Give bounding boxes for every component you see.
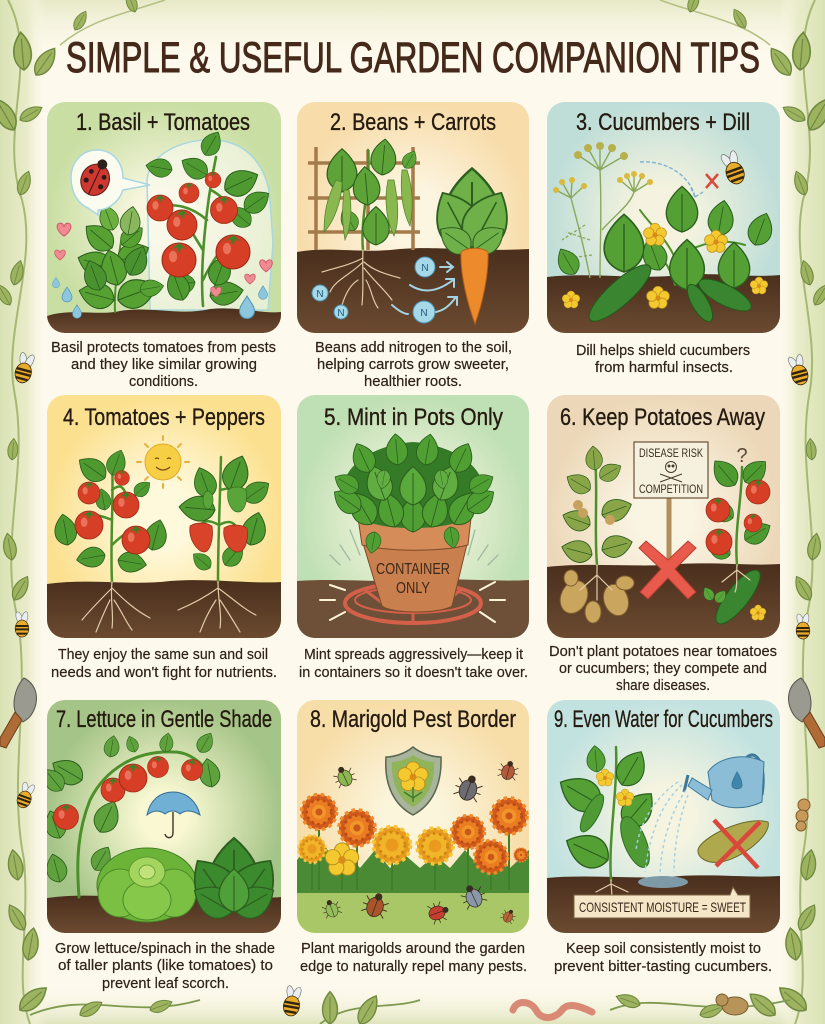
caption 7 — [55, 940, 275, 992]
pot — [358, 518, 471, 612]
trowel left — [0, 678, 36, 748]
panel title: 1. Basil + Tomatoes — [76, 109, 250, 136]
restriction ring — [345, 583, 481, 623]
roots — [596, 880, 628, 902]
caption 2: helping carrots grow sweeter, — [317, 356, 509, 373]
soil — [297, 248, 529, 333]
tomatoes — [706, 480, 770, 555]
tomatoes — [147, 172, 250, 277]
caption 5: Mint spreads aggressively—keep it — [304, 646, 524, 663]
cucumbers on plant — [576, 791, 655, 871]
bee, upper right — [786, 353, 811, 387]
panel 4: tomatoes + peppers — [47, 395, 281, 638]
panel 7: lettuce in gentle shade — [38, 700, 287, 933]
caterpillar right — [796, 799, 810, 831]
carrot — [461, 248, 488, 324]
panel 2: beans + carrots — [297, 102, 529, 333]
panel title: 6. Keep Potatoes Away — [560, 404, 765, 431]
shield — [386, 747, 441, 815]
stressed tomato plant — [705, 454, 775, 565]
bean plant — [324, 138, 420, 250]
caption 2: Beans add nitrogen to the soil, — [315, 339, 512, 356]
caption 3: Dill helps shield cucumbers — [576, 342, 750, 359]
hanging tomatoes — [54, 756, 202, 830]
bee, bottom — [281, 984, 303, 1017]
caption 5: in containers so it doesn't take over. — [299, 664, 528, 681]
panel title: 7. Lettuce in Gentle Shade — [56, 706, 272, 733]
caption 1: conditions. — [129, 373, 198, 390]
caption 1: Basil protects tomatoes from pests — [51, 339, 276, 356]
caption 3: from harmful insects. — [595, 359, 733, 376]
worm — [513, 1002, 592, 1018]
moisture sign — [574, 887, 750, 918]
caption 6: or cucumbers; they compete and — [559, 660, 767, 677]
right vine — [765, 0, 825, 1024]
pot label: ONLY — [396, 580, 430, 597]
marigolds — [298, 794, 528, 875]
panel 1: basil + tomatoes — [47, 102, 281, 333]
caption 6: share diseases. — [616, 677, 710, 694]
caption 8: edge to naturally repel many pests. — [300, 958, 527, 975]
motion lines — [320, 530, 505, 622]
caption 9 — [554, 940, 772, 975]
caption 7: prevent leaf scorch. — [102, 975, 229, 992]
umbrella — [147, 792, 200, 838]
panel title: 5. Mint in Pots Only — [324, 404, 503, 431]
soil — [47, 580, 281, 638]
cucumbers — [588, 264, 752, 322]
caption 1 — [51, 339, 276, 390]
caption 9: Keep soil consistently moist to — [566, 940, 761, 957]
pests — [320, 759, 520, 926]
bee and blocked arrow — [640, 149, 748, 197]
caption 9: prevent bitter-tasting cucumbers. — [554, 958, 772, 975]
tomato plant — [52, 447, 170, 582]
speech bubble around tomato — [147, 140, 273, 310]
bee, middle left — [14, 611, 29, 637]
cucumber flowers — [562, 223, 768, 308]
cucumber vine leaves — [552, 186, 777, 290]
tomatoes — [75, 470, 150, 554]
cucumber — [709, 564, 767, 630]
bee, lower left — [14, 780, 37, 810]
left vine — [0, 0, 61, 1024]
nitrogen markers: N — [421, 263, 429, 274]
bee, middle right — [795, 613, 810, 639]
soil — [547, 875, 780, 933]
soil — [47, 895, 281, 933]
hearts and water drops — [52, 223, 272, 318]
arrows to carrot — [392, 262, 457, 314]
panel title: 4. Tomatoes + Peppers — [63, 404, 265, 431]
nitrogen markers: N — [337, 308, 345, 319]
caption 8 — [300, 940, 527, 975]
nitrogen markers: N — [420, 308, 428, 319]
caption 3 — [576, 342, 750, 376]
puddle — [638, 876, 688, 888]
ladybug bubble — [71, 150, 150, 215]
potato plant — [559, 445, 635, 565]
tomato roots — [722, 565, 750, 592]
nitrogen markers: N — [316, 289, 324, 300]
pot label — [376, 563, 450, 593]
dill flower heads — [553, 142, 653, 193]
moisture sign: CONSISTENT MOISTURE = SWEET — [579, 899, 746, 915]
panel 5: mint in pots only — [297, 395, 529, 638]
trowel right — [789, 678, 825, 748]
cucumber flowers — [596, 769, 634, 806]
panel 6: keep potatoes away — [547, 395, 780, 638]
question mark: ? — [736, 445, 748, 467]
basil plant — [74, 202, 165, 313]
foliage band — [297, 845, 529, 893]
lettuce — [97, 848, 197, 922]
caption 5 — [299, 646, 528, 681]
stems — [312, 830, 509, 890]
small leaves and star flower — [701, 585, 766, 620]
watering can — [684, 755, 764, 808]
warning sign — [634, 442, 708, 568]
panel title: 8. Marigold Pest Border — [310, 706, 516, 733]
peppers — [190, 487, 248, 552]
skull icon — [660, 462, 682, 482]
warning sign: COMPETITION — [639, 482, 703, 496]
crossed bitter cucumber — [698, 820, 768, 868]
pepper plant — [178, 452, 274, 582]
bean roots — [322, 250, 400, 308]
roots — [82, 582, 256, 632]
soil — [547, 274, 780, 333]
soil — [547, 563, 780, 638]
mole — [716, 994, 748, 1015]
water spray — [636, 782, 688, 872]
panel 3: cucumbers + dill — [547, 102, 780, 333]
caption 6 — [549, 643, 777, 694]
bee, upper left — [12, 351, 37, 385]
tomato vine — [38, 730, 222, 897]
caption 2 — [315, 339, 512, 390]
nitrogen markers — [312, 257, 435, 323]
lawn — [297, 885, 529, 933]
panel 8: marigold pest border — [297, 700, 529, 933]
caption 4: needs and won't fight for nutrients. — [51, 664, 277, 681]
soil — [297, 579, 529, 638]
dill plants — [553, 142, 653, 278]
potato roots — [580, 565, 612, 600]
sun — [137, 436, 189, 488]
trellis — [308, 147, 420, 250]
bean pods — [324, 170, 412, 240]
ladybug — [80, 159, 110, 196]
spinach — [181, 838, 287, 925]
caption 8: Plant marigolds around the garden — [301, 940, 525, 957]
panel title: 3. Cucumbers + Dill — [576, 109, 750, 136]
carrot greens — [436, 167, 508, 255]
cucumber plant — [553, 745, 662, 880]
caption 4: They enjoy the same sun and soil — [58, 646, 268, 663]
caption 4 — [51, 646, 277, 681]
panel 9: even water for cucumbers — [547, 700, 780, 933]
caption 7: Grow lettuce/spinach in the shade — [55, 940, 275, 957]
caption 2: healthier roots. — [364, 373, 462, 390]
caption 1: and they like similar growing — [71, 356, 257, 373]
pot label: CONTAINER — [376, 561, 450, 578]
bottom vines — [30, 988, 790, 1024]
red cross — [639, 541, 696, 599]
mint leaves — [328, 432, 500, 555]
potatoes — [555, 570, 634, 623]
soil — [47, 308, 281, 333]
panel title: 2. Beans + Carrots — [330, 109, 496, 136]
warning sign: DISEASE RISK — [639, 446, 703, 460]
tomato plant — [144, 128, 274, 307]
caption 6: Don't plant potatoes near tomatoes — [549, 643, 777, 660]
top vines — [60, 0, 770, 45]
caption 7: of taller plants (like tomatoes) to — [58, 957, 273, 974]
